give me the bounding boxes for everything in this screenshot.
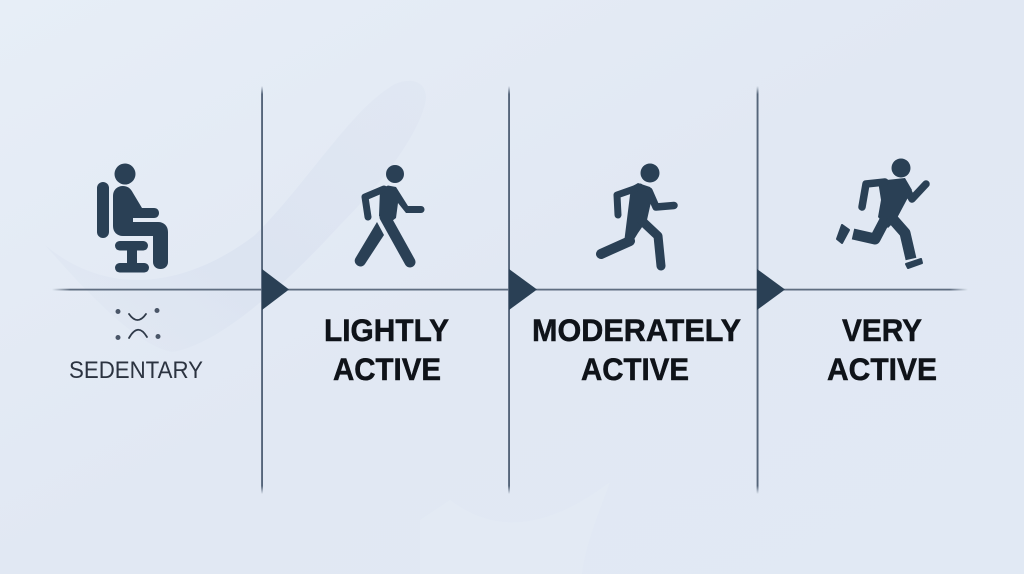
icon: seated person <box>97 164 168 272</box>
label: lightly active: LIGHTLY <box>324 312 449 348</box>
panel: sedentary <box>69 164 203 384</box>
arrow 3 <box>757 269 785 310</box>
divider 1 <box>261 86 263 494</box>
divider 2 <box>508 86 510 494</box>
divider 3 <box>757 86 758 494</box>
label: very active: VERY <box>842 312 922 348</box>
panel: moderately active: ACTIVE <box>581 351 689 387</box>
panel: lightly active <box>324 165 449 387</box>
icon: faces <box>116 308 160 340</box>
icon: walking person <box>355 165 424 266</box>
arrow 2 <box>509 269 537 310</box>
arrow 1 <box>262 269 289 310</box>
label: moderately active: MODERATELY <box>532 312 741 348</box>
icon: jogging person <box>601 164 674 266</box>
panel: very active <box>827 158 937 387</box>
panel: very active: ACTIVE <box>827 351 937 387</box>
timeline axis <box>52 289 968 290</box>
panel: moderately active <box>532 164 741 387</box>
panel: lightly active: ACTIVE <box>333 351 441 387</box>
label: sedentary: SEDENTARY <box>69 357 203 384</box>
icon: running person <box>837 158 926 268</box>
